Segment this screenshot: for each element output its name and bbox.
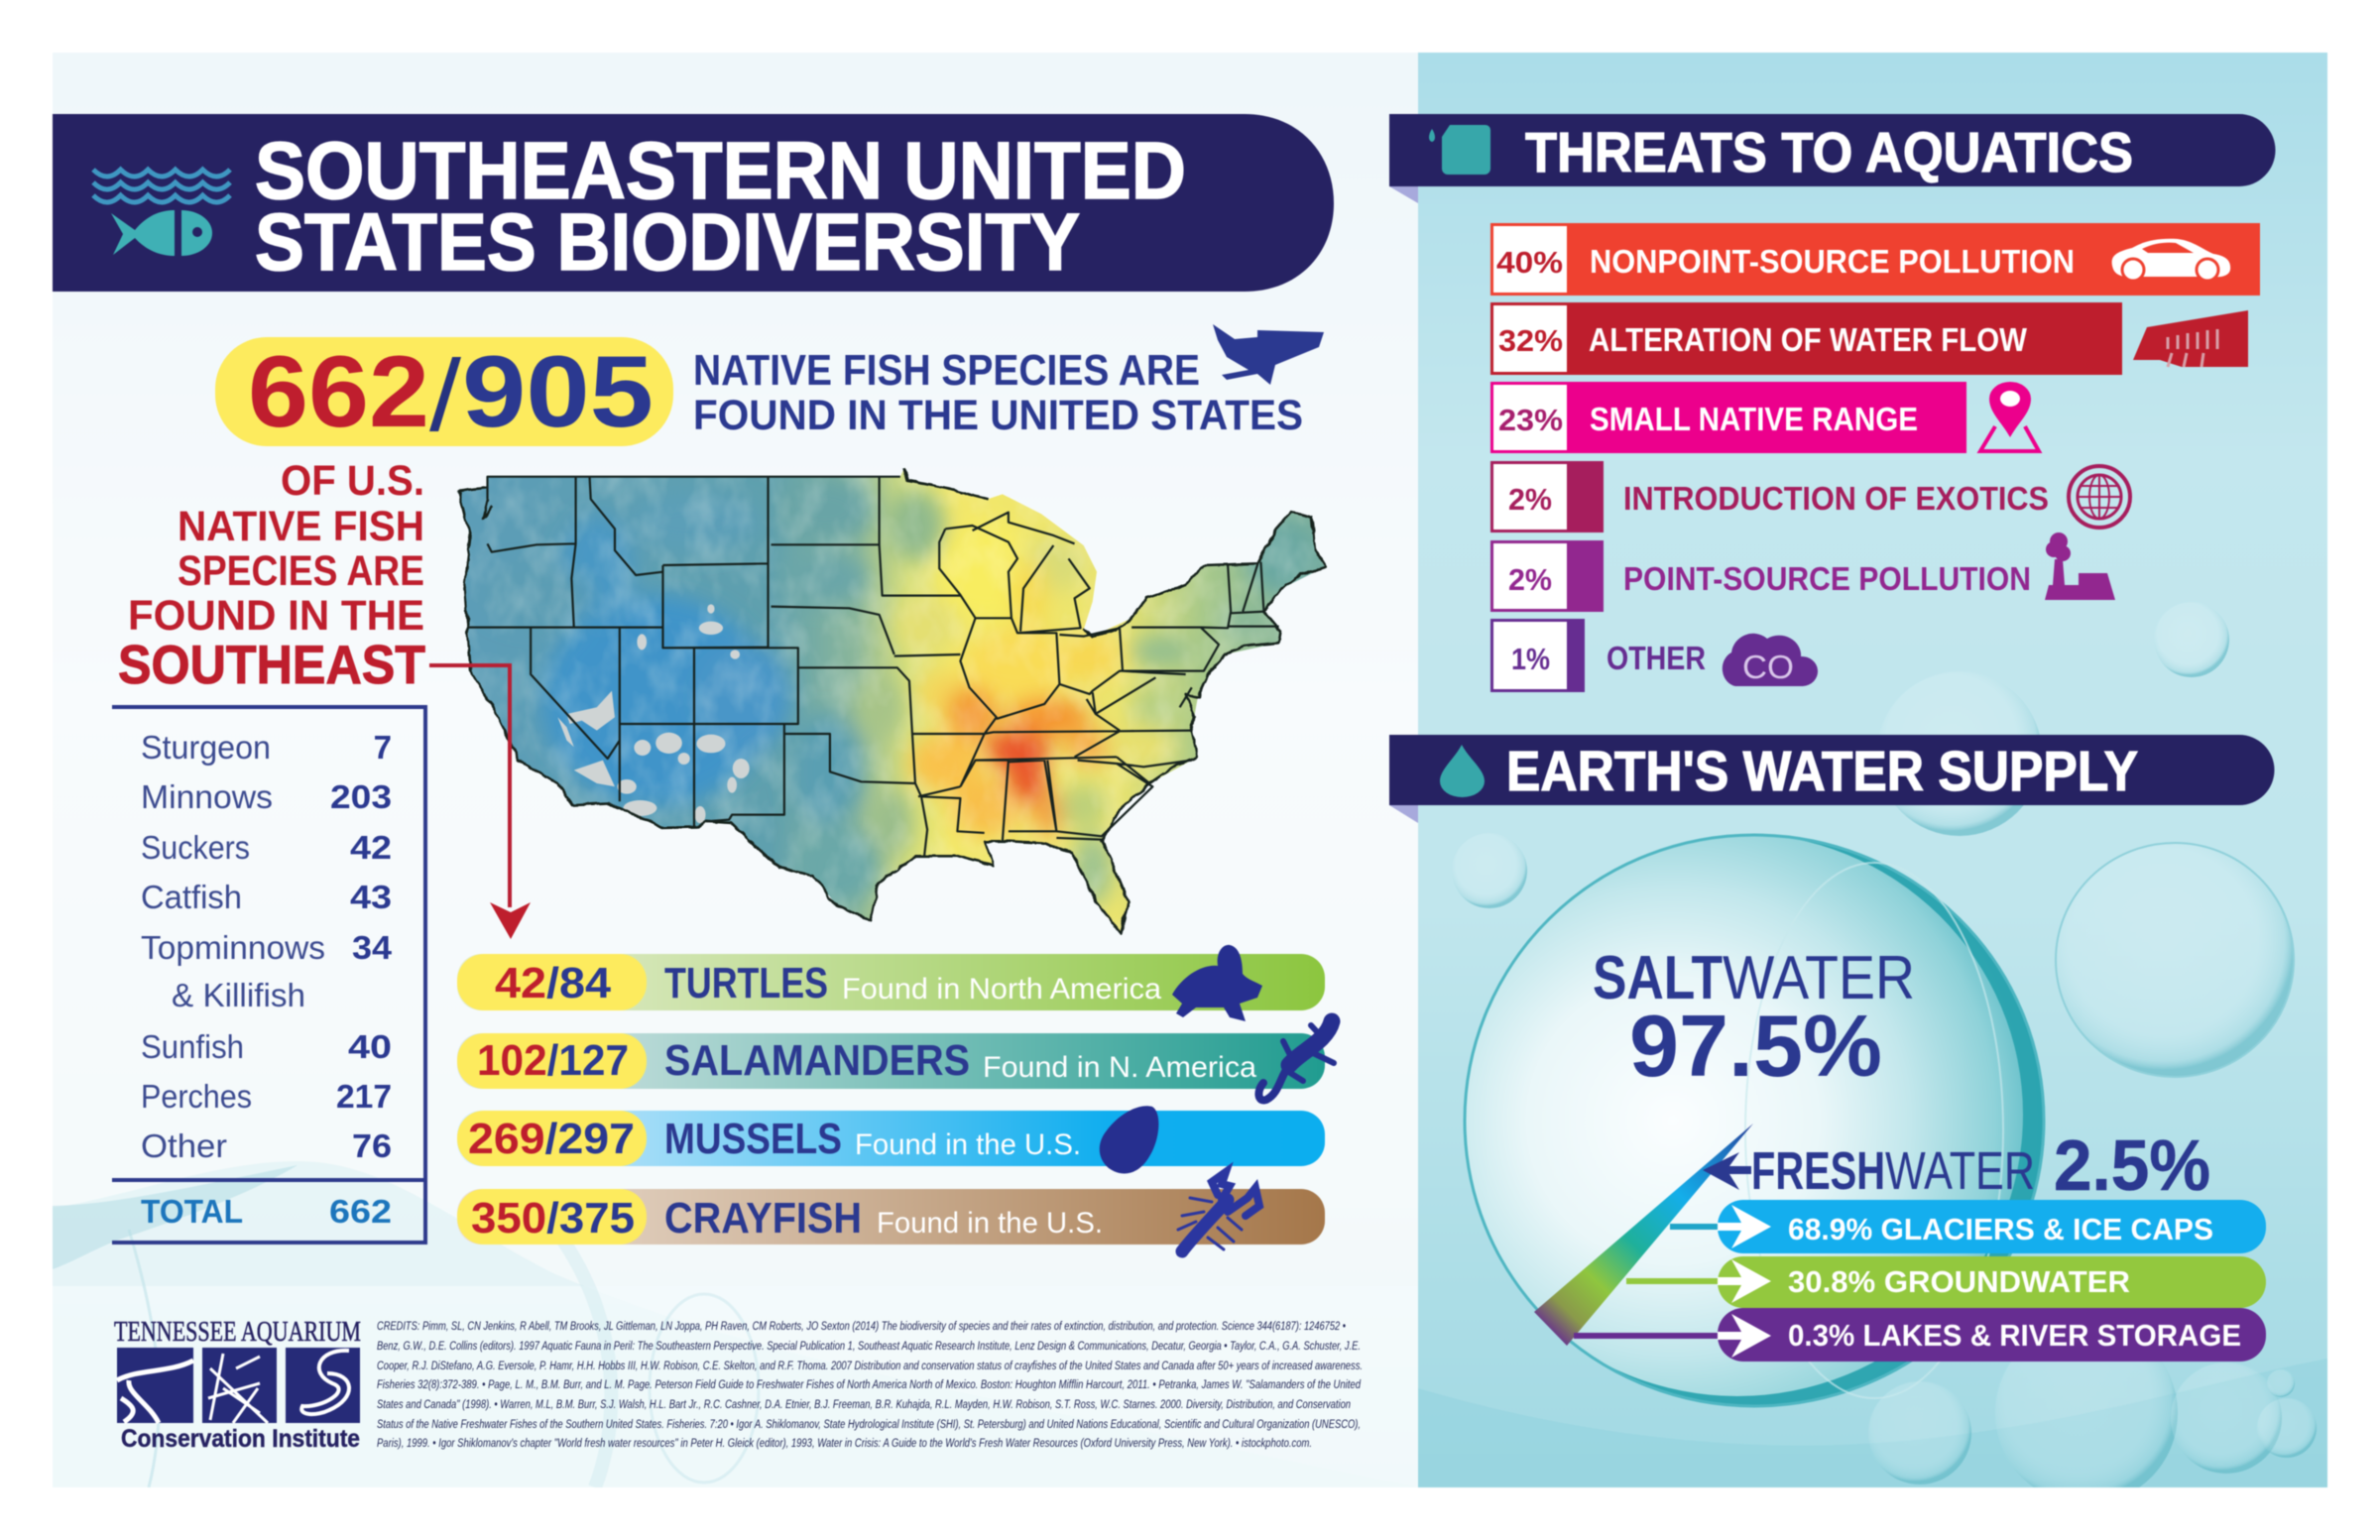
bar: turtles: TURTLES [664, 959, 828, 1007]
threats banner: THREATS TO AQUATICS [1525, 121, 2133, 184]
bar: nonpoint-source pollution 40%: 40% [1496, 245, 1563, 280]
credits text block: Paris), 1999. • Igor Shiklomanov's chapter "World fresh water resources" in Peter H. Gleick (editor), 1993, Water in Crisis: A Guide to the World's Fresh Water Resources (Oxford University Press, New York). • istockphoto.com. [377, 1438, 1312, 1450]
heading: SOUTHEASTERN UNITED [255, 126, 1186, 216]
mottled texture overlay [466, 472, 1315, 930]
bar: salamanders [457, 1021, 1334, 1100]
bar: salamanders: 102/127 [477, 1036, 629, 1085]
table: southeast fish families: 203 [330, 778, 392, 815]
icon: crayfish [1178, 1172, 1259, 1251]
table: southeast fish families: 34 [352, 929, 393, 966]
table: southeast fish families: 43 [350, 879, 392, 915]
bar: crayfish [457, 1172, 1325, 1251]
icon: dam [2133, 310, 2248, 367]
bar: crayfish: 350/375 [471, 1194, 635, 1243]
pill: lakes and river storage: 0.3% LAKES & RIVER STORAGE [1788, 1318, 2241, 1353]
icon: globe [2069, 466, 2130, 528]
water supply banner: EARTH'S WATER SUPPLY [1506, 740, 2138, 803]
stat: 662/905 native fish: 662 [248, 335, 429, 448]
threats banner [1389, 114, 2275, 203]
US fish species richness map [456, 467, 1328, 936]
bar: salamanders: Found in N. America [983, 1051, 1256, 1084]
bar: alteration of water flow 32%: 32% [1498, 323, 1563, 358]
left panel background [53, 53, 1418, 1487]
credits text block: Status of the Native Freshwater Fishes of the Southern United States. Fisheries. 7:20 • Igor A. Shiklomanov, State Hydrological Institute (SHI), St. Petersburg) and United Nations Educational, Scientific and Cultural Organization (UNESCO), [377, 1419, 1361, 1431]
icon: mussel [1100, 1106, 1158, 1173]
background bubble: top centre [1877, 671, 2042, 836]
pill: glaciers and ice caps [1670, 1200, 2266, 1253]
right panel background [1418, 53, 2327, 1487]
freshwater wedge [1534, 1124, 1753, 1346]
logo: Tennessee Aquarium Conservation Institute: TENNESSEE AQUARIUM [114, 1316, 361, 1348]
table: southeast fish families: 40 [348, 1028, 392, 1065]
bar: point-source pollution 2% [1490, 533, 2115, 612]
icon: car [2112, 239, 2230, 281]
bar: point-source pollution 2%: 2% [1508, 562, 1552, 597]
freshwater label and arrow: FRESH [1751, 1141, 1885, 1201]
credits text block: CREDITS: Pimm, SL, CN Jenkins, R Abell, TM Brooks, JL Gittleman, LN Joppa, PH Raven, CM Roberts, JO Sexton (2014) The biodiversity of species and their rates of extinction, distribution, and protection. Science 344(6187): 1246752 • [377, 1321, 1346, 1333]
bar: turtles [457, 945, 1325, 1021]
icon: leaping fish [1213, 324, 1324, 385]
table: southeast fish families: Sturgeon [141, 729, 271, 766]
state borders and coastlines [458, 468, 1325, 934]
table: southeast fish families: & Killifish [172, 977, 305, 1013]
bar: introduction of exotics 2%: 2% [1508, 482, 1552, 517]
credits text block: Benz, G.W., D.E. Collins (editors). 1997 Aquatic Fauna in Peril: The Southeastern Perspective. Special Publication 1, Southeast Aquatic Research Institute, Lenz Design & Communications, Decatur, Georgia • Taylor, C.A., G.A. Schuster, J.E. [377, 1341, 1361, 1353]
bar: turtles: Found in North America [842, 973, 1161, 1006]
bar: alteration of water flow 32%: ALTERATION OF WATER FLOW [1589, 321, 2028, 358]
bar: nonpoint-source pollution 40%: NONPOINT-SOURCE POLLUTION [1590, 243, 2075, 280]
pill: groundwater [1626, 1256, 2266, 1308]
bar: nonpoint-source pollution 40% [1490, 223, 2260, 296]
bubble rim crescent [1612, 841, 2043, 1406]
bar: small native range 23%: 23% [1498, 403, 1563, 437]
callout: share of US fish found in the Southeast [118, 457, 425, 695]
heading [255, 126, 1186, 288]
icon: fuel can [1429, 125, 1490, 175]
title banner [53, 114, 1334, 292]
heading: STATES BIODIVERSITY [255, 197, 1080, 288]
saltwater label: 97.5% [1629, 997, 1882, 1095]
credits text block: Fisheries 32(8):372-389. • Page, L. M., B.M. Burr, and L. M. Page. Peterson Field Guide to Freshwater Fishes of North America North of Mexico. Boston: Houghton Mifflin Harcourt, 2011. • Petranka, James W. "Salamanders of the United [377, 1379, 1361, 1391]
icon: CO2 cloud: CO [1742, 649, 1794, 685]
table: southeast fish families: 76 [352, 1127, 392, 1164]
table: southeast fish families: 42 [350, 829, 392, 866]
table: southeast fish families: Minnows [141, 778, 273, 815]
callout: share of US fish found in the Southeast: OF U.S. [281, 457, 424, 505]
logo: Tennessee Aquarium Conservation Institute [114, 1316, 361, 1453]
table: southeast fish families: Topminnows [141, 929, 325, 966]
bar: mussels: Found in the U.S. [855, 1128, 1081, 1161]
callout: share of US fish found in the Southeast: SPECIES ARE [178, 547, 424, 595]
table: southeast fish families: Perches [141, 1078, 252, 1115]
bar: turtles: 42/84 [495, 959, 612, 1007]
saltwater label [1593, 944, 1915, 1095]
bar: mussels: 269/297 [468, 1115, 635, 1163]
stat: 662/905 native fish: NATIVE FISH SPECIES ARE [693, 346, 1200, 395]
table: southeast fish families: Catfish [141, 879, 242, 915]
freshwater label and arrow [1703, 1126, 2210, 1206]
saltwater label: WATER [1723, 944, 1915, 1012]
callout: share of US fish found in the Southeast: SOUTHEAST [118, 634, 425, 695]
background bubble: large right [2056, 843, 2294, 1077]
saltwater label: SALT [1593, 944, 1723, 1012]
bar: salamanders: SALAMANDERS [664, 1036, 970, 1085]
icon: turtle [1172, 945, 1262, 1021]
table: southeast fish families: Other [141, 1127, 227, 1164]
bar: introduction of exotics 2%: INTRODUCTION OF EXOTICS [1623, 480, 2049, 517]
icon: salamander [1258, 1021, 1334, 1100]
credits text block: Cooper, R.J. DiStefano, A.G. Eversole, P. Hamr, H.H. Hobbs III, H.W. Robison, C.E. Skelton, and R.F. Thoma. 2007 Distribution and conservation status of crayfishes of the United States and Canada after 50+ years of increased awareness. [377, 1361, 1363, 1372]
table: southeast fish families: 662 [329, 1193, 392, 1230]
background bubble: small right [2154, 602, 2229, 677]
credits text block: States and Canada" (1998). • Warren, M.L, B.M. Burr, S.J. Walsh, H.L. Bart Jr., R.C. Cashner, D.A. Etnier, B.J. Freeman, B.R. Kuhajda, R.L. Mayden, H.W. Robison, S.T. Ross, W.C. Starnes. 2000. Diversity, Distribution, and Conservation [377, 1399, 1351, 1411]
bar: alteration of water flow 32% [1490, 302, 2248, 375]
callout: share of US fish found in the Southeast: FOUND IN THE [128, 592, 424, 640]
icon: map pin [1980, 382, 2039, 451]
icon: CO2 cloud [1723, 634, 1818, 686]
bar: small native range 23%: SMALL NATIVE RANGE [1590, 401, 1918, 437]
bar: mussels [457, 1106, 1325, 1173]
bar: mussels: MUSSELS [664, 1115, 842, 1163]
icon: factory [2045, 533, 2115, 600]
bar: other 1%: OTHER [1606, 640, 1706, 676]
icon: fish [111, 210, 212, 256]
icon: water drop [1440, 745, 1485, 797]
table: southeast fish families: Suckers [141, 829, 250, 866]
freshwater label and arrow: 2.5% [2054, 1126, 2210, 1206]
icon: waves [93, 170, 230, 202]
pill: groundwater: 30.8% GROUNDWATER [1788, 1264, 2130, 1299]
credits text block [377, 1321, 1363, 1450]
bubble cluster bottom right [1869, 1362, 2317, 1487]
bar: other 1% [1490, 619, 1818, 692]
table: southeast fish families: 7 [374, 729, 392, 766]
bar: point-source pollution 2%: POINT-SOURCE POLLUTION [1623, 560, 2031, 597]
bar: other 1%: 1% [1511, 642, 1550, 676]
pill: lakes and river storage [1574, 1308, 2266, 1362]
arrow: southeast pointer [429, 665, 531, 939]
table: southeast fish families: Sunfish [141, 1028, 244, 1065]
stat: 662/905 native fish: FOUND IN THE UNITED STATES [693, 392, 1303, 439]
stat: 662/905 native fish [215, 324, 1324, 452]
stat: 662/905 native fish: 905 [462, 335, 654, 448]
bar: introduction of exotics 2% [1490, 461, 2130, 533]
table: southeast fish families [112, 707, 425, 1243]
table: southeast fish families: TOTAL [141, 1193, 243, 1230]
water supply banner [1389, 735, 2275, 823]
background bubble: small left [1452, 833, 1527, 908]
logo: Tennessee Aquarium Conservation Institute: Conservation Institute [121, 1425, 360, 1453]
stat: 662/905 native fish: / [429, 339, 462, 452]
bar: crayfish: CRAYFISH [664, 1194, 862, 1243]
freshwater label and arrow: WATER [1885, 1141, 2035, 1201]
unsampled grey patches [557, 604, 750, 823]
table: southeast fish families: 217 [336, 1078, 392, 1115]
pill: glaciers and ice caps: 68.9% GLACIERS & ICE CAPS [1788, 1212, 2213, 1246]
bar: small native range 23% [1490, 382, 2039, 453]
bar: crayfish: Found in the U.S. [877, 1207, 1103, 1240]
callout: share of US fish found in the Southeast: NATIVE FISH [178, 503, 424, 550]
chart: saltwater bubble [1452, 833, 2045, 1407]
